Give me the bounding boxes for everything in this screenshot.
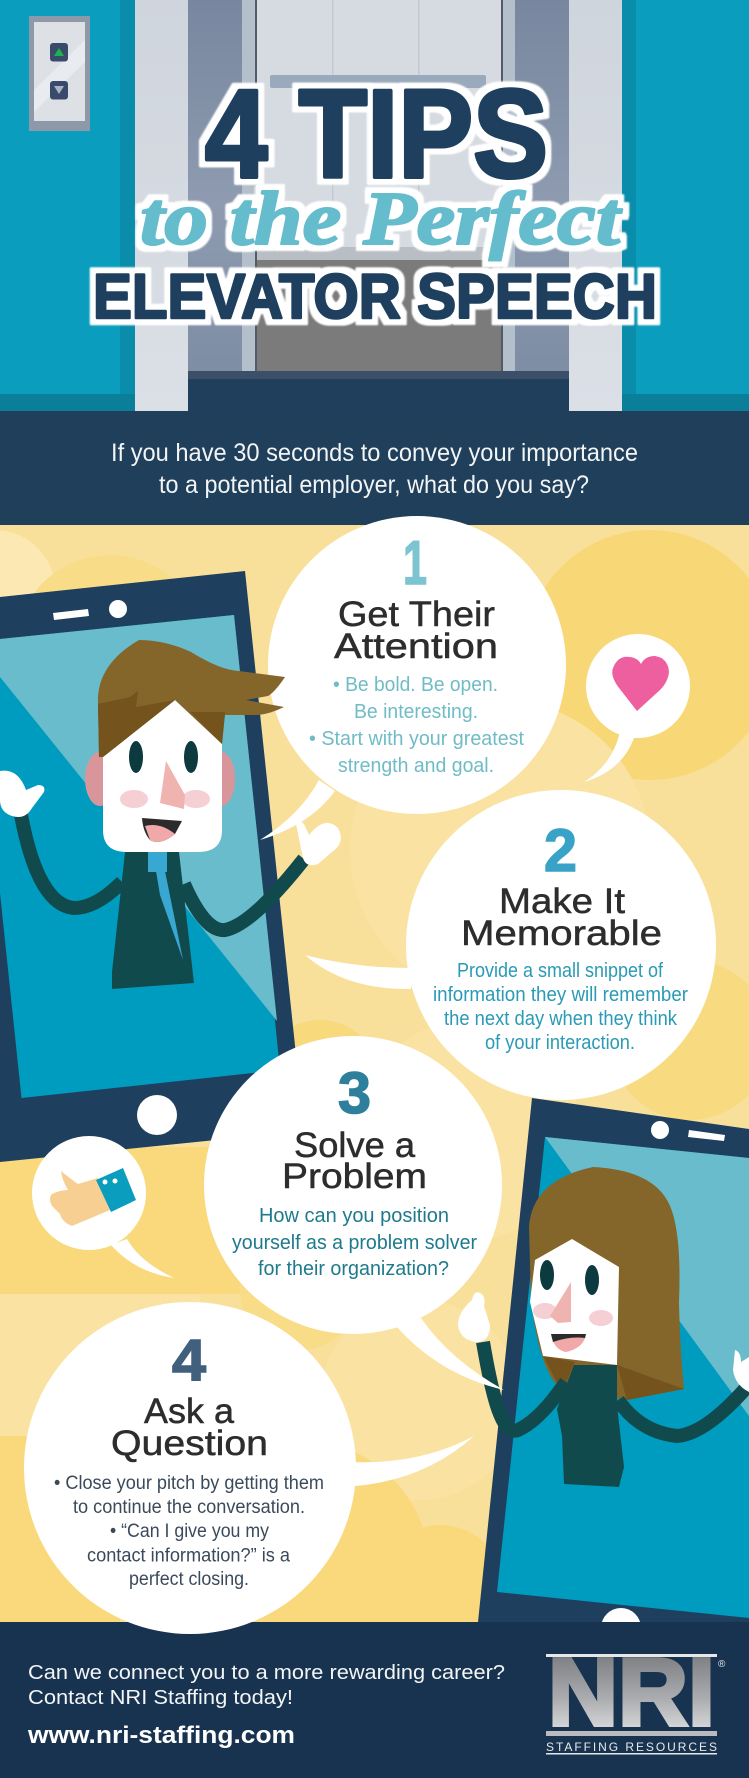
tip 4 text: 4: [172, 1328, 206, 1393]
tip 4 text: Ask a: [144, 1392, 235, 1431]
tip 2 text: [433, 817, 688, 1054]
tip 2 text: of your interaction.: [485, 1032, 635, 1054]
intro band: If you have 30 seconds to convey your importance: [111, 439, 638, 467]
footer band: [0, 1622, 749, 1778]
tip 3 text: 3: [338, 1061, 371, 1126]
tip 1 text: • Start with your greatest: [309, 728, 524, 750]
tip 2 text: the next day when they think: [444, 1008, 678, 1030]
tip 3 text: [232, 1061, 477, 1280]
tip 2 text: Make It: [499, 882, 625, 921]
tip 2 text: information they will remember: [433, 984, 688, 1006]
panel: tip 4 speech bubble: [24, 1302, 474, 1634]
man character: [0, 640, 341, 989]
icon: thumbs up speech bubble: [32, 1136, 174, 1278]
tip 4 text: [54, 1328, 324, 1590]
panel: tip 3 speech bubble: [204, 1036, 504, 1390]
tip 4 text: • Close your pitch by getting them: [54, 1473, 324, 1494]
tip 3 text: How can you position: [259, 1205, 449, 1227]
tip 1 text: • Be bold. Be open.: [333, 674, 498, 696]
tip 1 text: Attention: [334, 627, 498, 666]
tip 2 text: Memorable: [461, 914, 662, 953]
icon: elevator call buttons: [29, 16, 90, 131]
tip 4 text: Question: [111, 1424, 268, 1463]
footer band: Can we connect you to a more rewarding career?: [28, 1662, 505, 1684]
tip 1 text: strength and goal.: [338, 755, 494, 777]
panel: tip 1 speech bubble: [260, 516, 566, 840]
intro band: to a potential employer, what do you say?: [159, 471, 589, 499]
header: elevator scene: [0, 0, 749, 411]
tip 3 text: for their organization?: [258, 1258, 449, 1280]
tip 4 text: perfect closing.: [129, 1569, 249, 1590]
title: 4 TIPS: [205, 65, 548, 204]
panel: tip 2 speech bubble: [305, 790, 716, 1100]
logo: NRI Staffing Resources: STAFFING RESOURCES: [546, 1740, 717, 1754]
tip 3 text: Solve a: [294, 1126, 416, 1165]
tip 2 text: Provide a small snippet of: [457, 960, 663, 982]
icon: heart speech bubble: [584, 634, 690, 782]
tip 1 text: [309, 529, 524, 777]
title: ELEVATOR SPEECH: [93, 262, 657, 332]
logo: NRI Staffing Resources: ®: [718, 1659, 726, 1670]
footer band: www.nri-staffing.com: [27, 1722, 295, 1749]
yellow background with decorative bubbles: [0, 525, 749, 1700]
tip 1 text: 1: [403, 529, 427, 598]
tip 4 text: contact information?” is a: [87, 1546, 290, 1566]
footer band: Contact NRI Staffing today!: [28, 1687, 293, 1709]
woman character: [458, 1167, 749, 1487]
tip 4 text: to continue the conversation.: [73, 1497, 305, 1518]
title: [93, 65, 657, 332]
tip 3 text: yourself as a problem solver: [232, 1232, 477, 1254]
title: to the Perfect: [140, 177, 623, 261]
right phone: [478, 1098, 749, 1648]
tip 2 text: 2: [544, 817, 577, 884]
tip 1 text: Be interesting.: [354, 701, 478, 723]
logo: NRI Staffing Resources: NRI: [548, 1639, 715, 1746]
intro band: [0, 411, 749, 525]
tip 3 text: Problem: [282, 1157, 427, 1196]
tip 1 text: Get Their: [338, 595, 495, 634]
left phone: [0, 571, 304, 1162]
tip 4 text: • “Can I give you my: [110, 1521, 269, 1542]
